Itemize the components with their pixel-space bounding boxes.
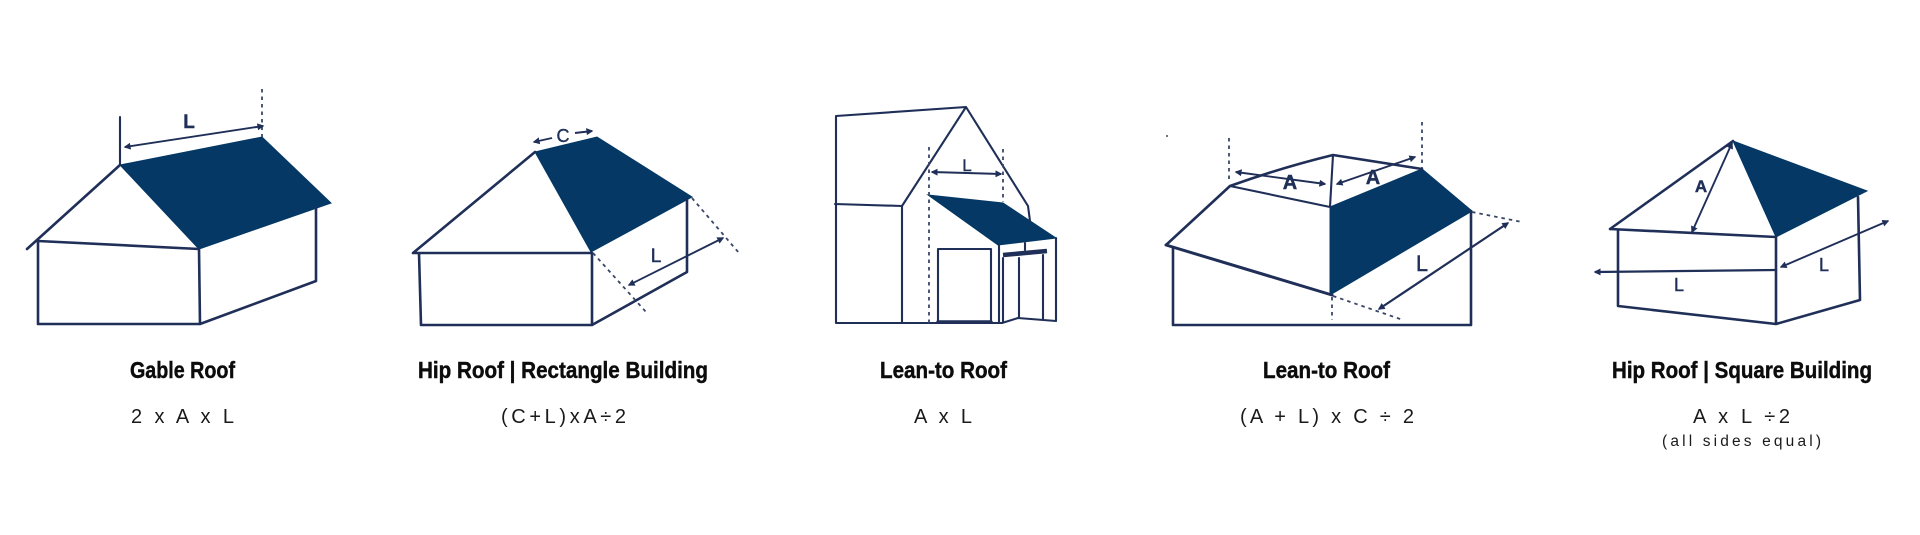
panel: hip roof rectangle building: [413, 126, 739, 428]
heading: gable roof: Gable Roof: [130, 357, 235, 383]
icon: hip roof square building: L: [1674, 275, 1684, 295]
heading: lean-to roof: Lean-to Roof: [880, 357, 1007, 383]
panel: lean-to roof trapezoid: [1166, 122, 1522, 428]
panel: gable roof: [27, 89, 331, 428]
icon: lean-to roof building with porch: [835, 107, 1056, 323]
icon: hip roof rectangle building: C: [556, 126, 570, 146]
icon: lean-to roof truncated hip building: A: [1366, 167, 1380, 189]
formula: hip roof rectangle building: (C+L)xA÷2: [501, 406, 626, 428]
heading: hip roof square building: Hip Roof | Square Building: [1612, 357, 1872, 383]
panel: hip roof square building: [1595, 141, 1888, 450]
icon: hip roof square building: [1595, 141, 1888, 324]
formula: lean-to roof: A x L: [914, 406, 972, 428]
icon: lean-to roof building with porch: L: [962, 156, 972, 175]
heading: lean-to roof: Lean-to Roof: [1263, 357, 1390, 383]
panel: lean-to roof porch: [835, 107, 1056, 428]
icon: lean-to roof truncated hip building: A: [1283, 172, 1297, 194]
icon: hip roof rectangle building: [413, 126, 739, 325]
formula: gable roof: 2 x A x L: [131, 406, 234, 428]
stray dot: [1166, 135, 1168, 137]
icon: hip roof square building: A: [1695, 177, 1707, 196]
heading: hip roof rectangle building: Hip Roof | Rectangle Building: [418, 357, 708, 383]
icon: gable roof building: [27, 89, 331, 324]
icon: lean-to roof truncated hip building: L: [1416, 251, 1428, 276]
formula: lean-to roof trapezoid: (A + L) x C ÷ 2: [1240, 406, 1414, 428]
icon: hip roof square building: L: [1819, 255, 1829, 275]
formula: hip roof square building: A x L ÷2: [1693, 406, 1790, 428]
icon: lean-to roof truncated hip building: [1166, 122, 1522, 325]
note: all sides equal: (all sides equal): [1662, 433, 1821, 450]
icon: gable roof building: L: [183, 112, 195, 133]
icon: hip roof rectangle building: L: [651, 246, 661, 267]
